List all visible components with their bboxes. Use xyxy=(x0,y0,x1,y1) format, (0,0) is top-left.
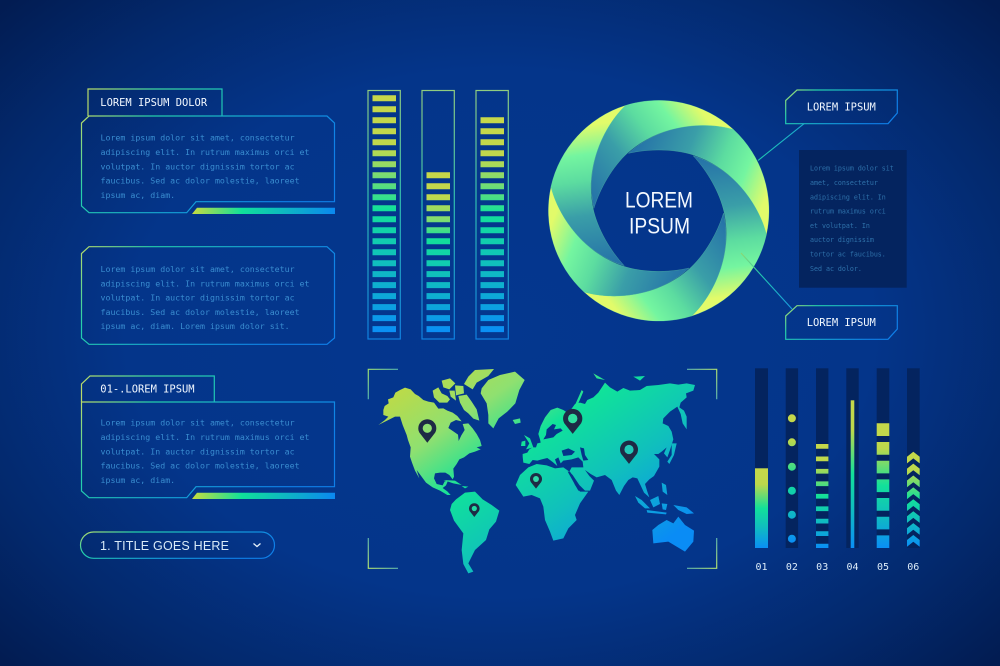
title pill dropdown: 1. TITLE GOES HERE xyxy=(100,539,229,553)
world map xyxy=(378,369,695,573)
chart: column 05 squares: 05 xyxy=(877,562,889,573)
donut center label: IPSUM xyxy=(629,213,690,238)
panel: side description: Lorem ipsum dolor sit xyxy=(810,165,894,173)
text block: ipsum ac, diam. xyxy=(100,190,175,200)
icon: map pin south america xyxy=(469,503,480,517)
donut center label: LOREM xyxy=(625,187,693,212)
chart: column 05 squares xyxy=(877,368,889,573)
text block: volutpat. In auctor dignissim tortor ac xyxy=(100,161,295,171)
connector line to top label xyxy=(758,124,804,160)
map frame corners xyxy=(368,369,717,568)
panel: side description: et volutpat. In xyxy=(810,222,870,230)
panel frame xyxy=(82,402,334,498)
chart: segmented bar one xyxy=(368,90,400,339)
text block: Lorem ipsum dolor sit amet, consectetur xyxy=(100,133,295,143)
panel: side description: Sed ac dolor. xyxy=(810,265,862,273)
chart: column 03 stripes: 03 xyxy=(816,562,828,573)
chart: column 02 dots: 02 xyxy=(786,562,798,573)
chart: column 04 thin line xyxy=(846,368,859,573)
panel frame xyxy=(82,247,334,344)
icon: map pin europe xyxy=(563,409,582,434)
panel: lorem ipsum dolor xyxy=(82,89,335,214)
text block: volutpat. In auctor dignissim tortor ac xyxy=(100,446,295,456)
inland seas xyxy=(543,424,588,491)
label: lorem ipsum top: LOREM IPSUM xyxy=(807,102,876,114)
text block: ipsum ac, diam. xyxy=(100,475,175,485)
text block: Lorem ipsum dolor sit amet, consectetur xyxy=(100,264,295,274)
gradient accent bar xyxy=(192,493,335,499)
panel: 01 lorem ipsum xyxy=(82,376,335,499)
donut chart: swirl xyxy=(530,72,788,349)
tab: lorem ipsum dolor: LOREM IPSUM DOLOR xyxy=(100,97,208,109)
text block: ipsum ac, diam. Lorem ipsum dolor sit. xyxy=(100,321,290,331)
icon: chevron down xyxy=(254,544,260,546)
chart: segmented bar three xyxy=(476,90,508,339)
panel: side description: tortor ac faucibus. xyxy=(810,250,886,258)
text block: volutpat. In auctor dignissim tortor ac xyxy=(100,293,295,303)
panel: body text two xyxy=(82,247,334,344)
icon: map pin north america xyxy=(418,419,436,443)
panel frame xyxy=(82,116,334,213)
chart: column 03 stripes xyxy=(816,368,828,573)
chart: column 06 chevrons xyxy=(907,368,920,573)
connector line to bottom label xyxy=(741,253,792,309)
text block: adipiscing elit. In rutrum maximus orci et xyxy=(100,147,310,157)
label: lorem ipsum bottom xyxy=(786,306,897,339)
chart: column 02 dots xyxy=(786,368,798,573)
text block: faucibus. Sed ac dolor molestie, laoreet xyxy=(100,176,300,186)
label: lorem ipsum bottom: LOREM IPSUM xyxy=(807,317,876,329)
text block: adipiscing elit. In rutrum maximus orci et xyxy=(100,432,310,442)
panel: side description: amet, consectetur xyxy=(810,179,878,187)
americas and greenland xyxy=(378,369,525,573)
panel: side description: auctor dignissim xyxy=(810,236,874,244)
africa, eurasia and australia xyxy=(516,373,695,552)
title pill dropdown xyxy=(80,532,274,558)
text block: faucibus. Sed ac dolor molestie, laoreet xyxy=(100,307,300,317)
chart: column 01 solid fill: 01 xyxy=(755,562,768,573)
chart: column 06 chevrons: 06 xyxy=(907,562,919,573)
donut center label xyxy=(625,187,693,238)
icon: map pin asia xyxy=(620,441,638,464)
chart: column 04 thin line: 04 xyxy=(846,562,859,573)
text block: adipiscing elit. In rutrum maximus orci et xyxy=(100,278,310,288)
icon: map pin africa xyxy=(530,473,542,489)
tab: 01 lorem ipsum: 01-.LOREM IPSUM xyxy=(100,384,195,396)
tab: lorem ipsum dolor xyxy=(88,89,222,116)
text block: Lorem ipsum dolor sit amet, consectetur xyxy=(100,418,295,428)
panel: side description: adipiscing elit. In xyxy=(810,193,886,201)
text block: faucibus. Sed ac dolor molestie, laoreet xyxy=(100,461,300,471)
tab: 01 lorem ipsum xyxy=(82,376,214,402)
chart: column 01 solid fill xyxy=(755,368,768,573)
gradient accent bar xyxy=(192,208,335,214)
panel: side description: rutrum maximus orci xyxy=(810,208,886,216)
chart: segmented bar two xyxy=(422,90,454,339)
label: lorem ipsum top xyxy=(786,90,897,124)
panel: side description xyxy=(799,150,907,288)
